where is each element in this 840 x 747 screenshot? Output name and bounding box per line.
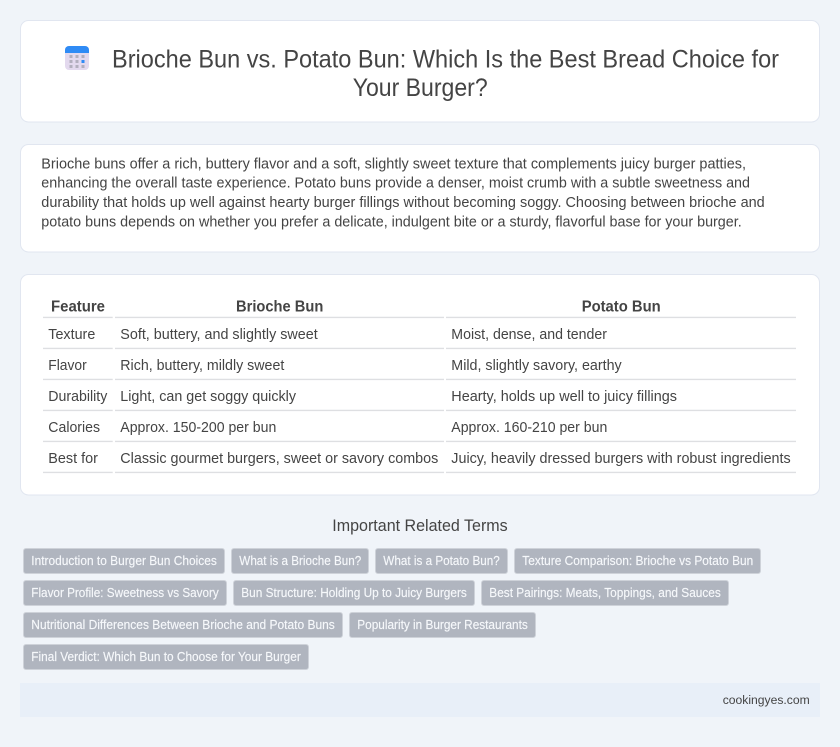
title: Brioche Bun vs. Potato Bun: Which Is the Best Bread Choice for <box>112 46 779 74</box>
tag: Introduction to Burger Bun Choices <box>31 554 217 568</box>
panel: summary text <box>20 144 820 252</box>
summary paragraph: potato buns depends on whether you prefer a delicate, indulgent bite or a sturdy, flavorful base for your burger. <box>41 214 742 230</box>
row: durability: Hearty, holds up well to juicy fillings <box>451 389 677 405</box>
tag: Final Verdict: Which Bun to Choose for Your Burger <box>31 650 301 664</box>
row: texture: Soft, buttery, and slightly sweet <box>120 327 318 343</box>
summary paragraph: Brioche buns offer a rich, buttery flavor and a soft, slightly sweet texture that complements juicy burger patties, <box>41 155 746 172</box>
icon: calendar <box>65 46 89 70</box>
table header row: Potato Bun <box>582 299 661 316</box>
row: flavor: Rich, buttery, mildly sweet <box>120 358 284 374</box>
tag <box>24 548 224 574</box>
title <box>112 46 779 102</box>
row: calories: Calories <box>48 420 100 436</box>
row: flavor: Flavor <box>48 358 87 374</box>
heading: related terms: Important Related Terms <box>332 517 508 535</box>
tag: Best Pairings: Meats, Toppings, and Sauces <box>489 586 721 600</box>
summary paragraph: enhancing the overall taste experience. Potato buns provide a denser, moist crumb with a subtle sweetness and <box>41 175 750 192</box>
row: durability: Durability <box>48 389 108 405</box>
table header row <box>51 299 661 316</box>
tag: What is a Brioche Bun? <box>239 554 361 568</box>
row: flavor <box>48 358 622 374</box>
related term tags <box>24 548 760 670</box>
row: texture: Texture <box>48 327 95 343</box>
tag: Nutritional Differences Between Brioche and Potato Buns <box>31 618 335 632</box>
tag <box>24 612 342 638</box>
row: best for <box>48 451 791 467</box>
panel: comparison table <box>20 274 820 495</box>
header panel <box>20 20 820 122</box>
row: best for: Classic gourmet burgers, sweet or savory combos <box>120 451 438 467</box>
row: durability <box>48 389 677 405</box>
table header row: Brioche Bun <box>236 299 323 316</box>
row: best for: Juicy, heavily dressed burgers with robust ingredients <box>451 451 791 467</box>
tag <box>24 644 308 670</box>
row: durability: Light, can get soggy quickly <box>120 389 297 405</box>
tag: What is a Potato Bun? <box>383 554 500 568</box>
row: flavor: Mild, slightly savory, earthy <box>451 358 622 374</box>
table header row: Feature <box>51 299 105 316</box>
tag <box>350 612 536 638</box>
summary paragraph <box>41 155 765 230</box>
row: calories <box>48 420 607 436</box>
tag <box>482 580 728 606</box>
row: best for: Best for <box>48 451 98 467</box>
tag: Bun Structure: Holding Up to Juicy Burgers <box>241 586 467 600</box>
row: calories: Approx. 160-210 per bun <box>451 420 607 436</box>
tag: Texture Comparison: Brioche vs Potato Bun <box>522 554 753 568</box>
tag <box>514 548 760 574</box>
tag: Popularity in Burger Restaurants <box>357 618 528 632</box>
tag <box>376 548 508 574</box>
tag: Flavor Profile: Sweetness vs Savory <box>31 586 219 600</box>
title: Your Burger? <box>353 75 488 102</box>
row: texture: Moist, dense, and tender <box>451 327 607 343</box>
summary paragraph: durability that holds up well against hearty burger fillings without becoming soggy. Choosing between brioche and <box>41 194 765 211</box>
tag <box>24 580 226 606</box>
footer bar <box>20 683 820 717</box>
footer bar: cookingyes.com <box>723 693 810 707</box>
row: calories: Approx. 150-200 per bun <box>120 420 276 436</box>
tag <box>232 548 368 574</box>
tag <box>234 580 474 606</box>
row: texture <box>48 327 607 343</box>
